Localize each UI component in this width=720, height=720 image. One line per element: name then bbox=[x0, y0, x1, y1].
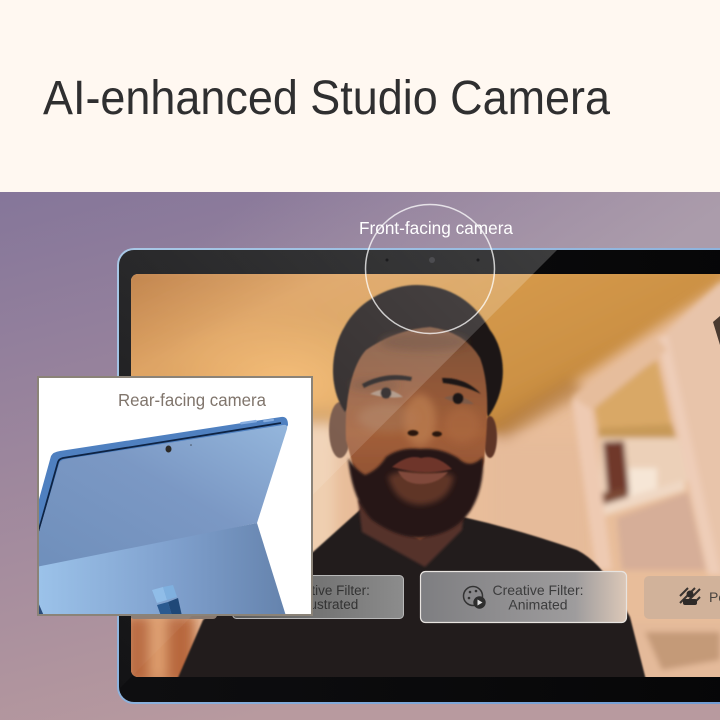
icon: palette with play badge bbox=[464, 586, 486, 609]
rear-facing camera label: Rear-facing camera bbox=[118, 390, 266, 410]
rear camera lens bbox=[166, 446, 172, 452]
person bbox=[177, 285, 646, 680]
tablet frame bbox=[117, 248, 720, 704]
hair bbox=[333, 285, 503, 417]
front camera dots bbox=[386, 257, 480, 263]
title: AI-enhanced Studio Camera bbox=[43, 72, 610, 125]
face skin bbox=[346, 327, 487, 540]
card: creative filter illustrated bbox=[232, 576, 404, 618]
eyes bbox=[370, 388, 474, 404]
tablet front view bbox=[117, 248, 720, 704]
icon: logo on kickstand bbox=[152, 585, 182, 616]
beard bbox=[348, 449, 483, 537]
inset: rear-facing camera bbox=[36, 377, 312, 616]
doorway alcove bbox=[593, 360, 674, 437]
filter cards row bbox=[130, 572, 720, 622]
lips bbox=[392, 457, 452, 472]
kickstand bbox=[36, 523, 286, 616]
header band bbox=[0, 0, 720, 192]
card: creative filter animated: Animated bbox=[508, 596, 568, 612]
card: creative filter illustrated: Creative Filter: bbox=[282, 583, 370, 598]
tablet rear view bbox=[36, 417, 288, 616]
card: previous option bbox=[131, 616, 217, 619]
icon: portrait blur bbox=[680, 588, 700, 605]
screen: video call photo bbox=[120, 265, 720, 685]
card: creative filter animated: Creative Filter: bbox=[492, 582, 584, 598]
face shading bbox=[349, 333, 480, 446]
shirt bbox=[177, 508, 646, 680]
ears bbox=[329, 402, 351, 458]
card: creative filter illustrated: Illustrated bbox=[300, 597, 358, 612]
callout: front-facing camera bbox=[359, 204, 513, 334]
glass glare bbox=[119, 250, 557, 630]
callout: front-facing camera: Front-facing camera bbox=[359, 218, 513, 238]
gradient backdrop bbox=[0, 192, 720, 720]
neck bbox=[358, 500, 465, 567]
nostrils bbox=[408, 430, 442, 437]
card: creative filter animated bbox=[420, 572, 626, 622]
card: portrait bbox=[644, 576, 720, 619]
room background bbox=[120, 265, 720, 685]
eyebrows bbox=[362, 375, 481, 394]
chin skin patch bbox=[388, 469, 454, 505]
